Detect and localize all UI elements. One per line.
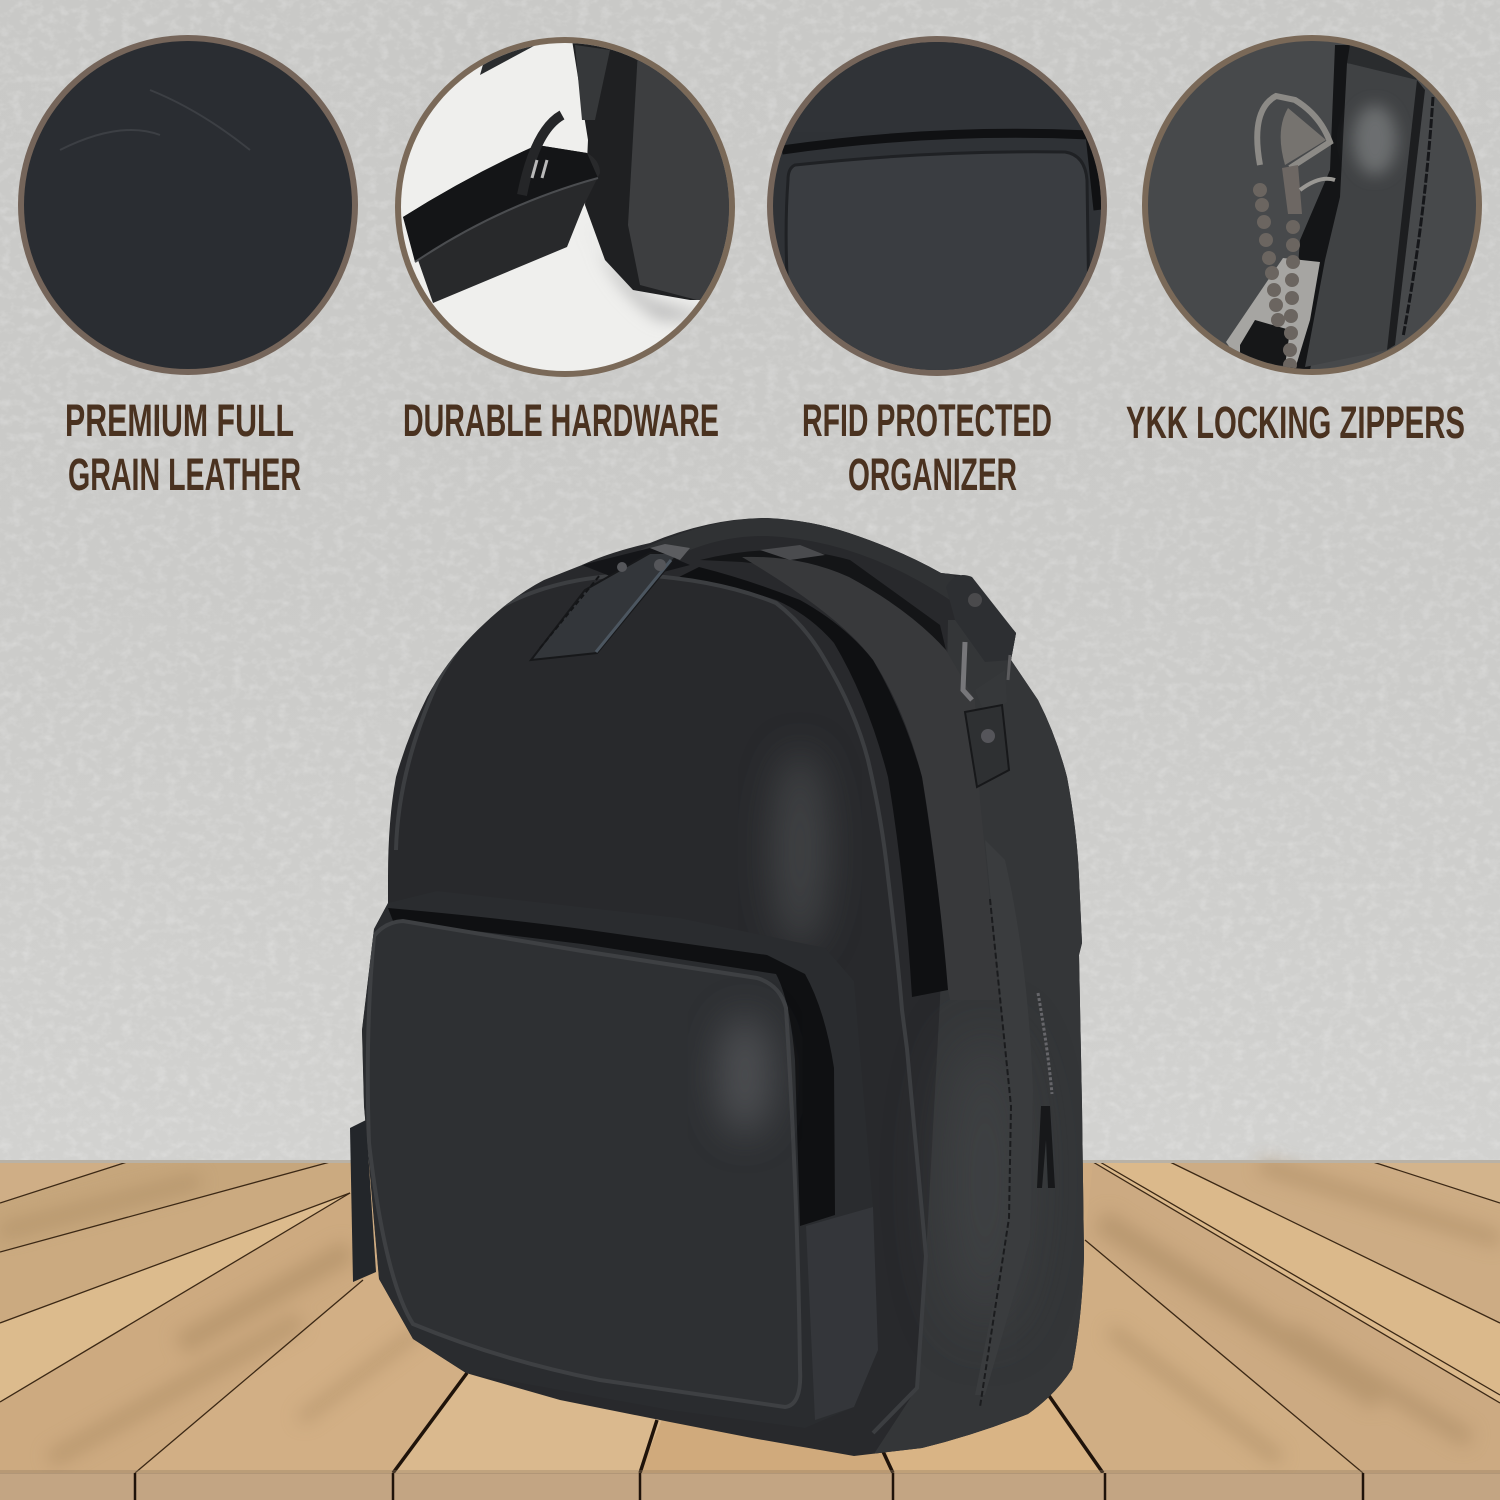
zipper pull — [1226, 258, 1320, 366]
wall background — [0, 0, 1500, 1162]
circle: ykk locking zippers — [1142, 35, 1482, 375]
strap top corner — [480, 46, 534, 75]
circle: rfid protected organizer — [767, 36, 1110, 376]
backpack side — [572, 40, 740, 300]
side panel — [870, 620, 1100, 1460]
label: premium full grain leather: PREMIUM FULL — [65, 395, 294, 446]
top handle dark edge — [582, 548, 690, 582]
label: rfid protected organizer — [802, 395, 1052, 500]
label: rfid protected organizer: RFID PROTECTED — [802, 395, 1052, 446]
label: rfid protected organizer: ORGANIZER — [848, 449, 1017, 500]
shadow on ground — [602, 256, 696, 328]
handle band — [640, 518, 960, 600]
circle: premium full grain leather — [18, 35, 358, 375]
front highlights — [772, 750, 828, 950]
pocket gusset — [362, 903, 465, 1372]
zipper pulls — [531, 553, 679, 660]
ball chains — [1253, 183, 1300, 372]
front piping — [396, 575, 926, 1433]
strap connector — [946, 575, 1016, 662]
dark stripe — [1387, 80, 1425, 350]
pocket highlights — [719, 1015, 771, 1135]
strap — [403, 145, 600, 303]
side zipper pull — [1037, 1106, 1055, 1188]
label: premium full grain leather — [65, 395, 301, 500]
pocket flap — [368, 921, 800, 1407]
flap — [1305, 63, 1350, 367]
pocket side stitch patch — [806, 1207, 878, 1420]
bead chain — [1038, 993, 1052, 1094]
gusset below handle — [742, 556, 948, 922]
label: premium full grain leather: GRAIN LEATHER — [68, 449, 301, 500]
wooden floor — [0, 1160, 1500, 1500]
stitch — [1403, 97, 1433, 337]
pocket zipper — [388, 908, 835, 1226]
d-ring — [1257, 96, 1330, 168]
label: durable hardware: DURABLE HARDWARE — [403, 395, 719, 446]
main zipper band — [679, 567, 948, 997]
circle: durable hardware — [395, 37, 740, 377]
side strap — [975, 840, 1033, 1395]
black gap — [1290, 45, 1350, 370]
body base — [340, 510, 1100, 1470]
left zipper tag — [350, 1120, 376, 1282]
backpack — [340, 510, 1100, 1470]
